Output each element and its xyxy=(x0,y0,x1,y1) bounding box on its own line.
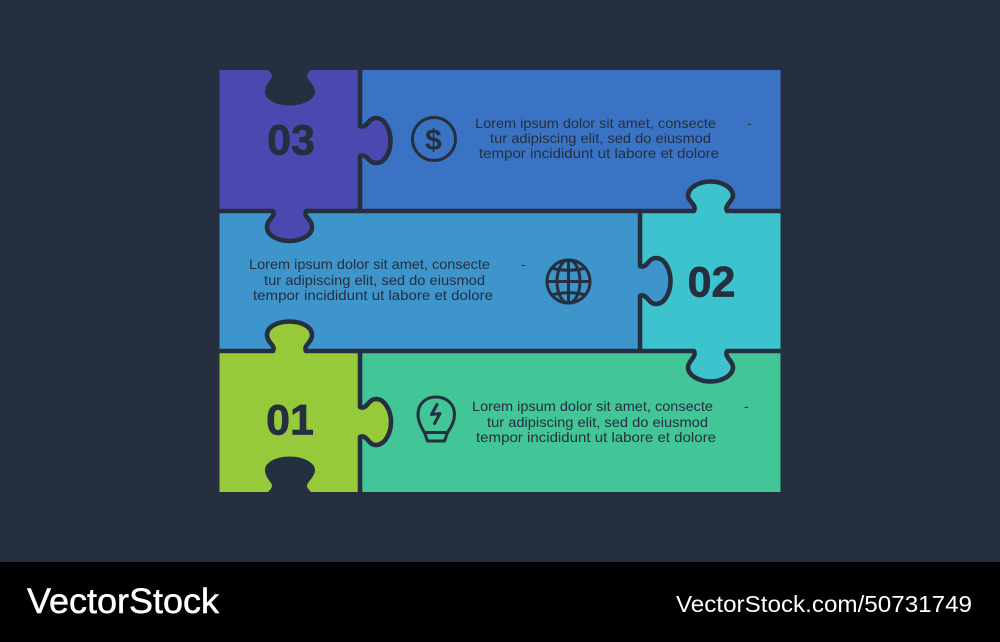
text block: row 2: tempor incididunt ut labore et dolore xyxy=(253,288,493,303)
footer logo: VectorStock xyxy=(27,582,220,621)
icon: light bulb xyxy=(418,397,454,441)
text block: row 2: Lorem ipsum dolor sit amet, consecte xyxy=(249,257,490,272)
number 01: 01 xyxy=(266,396,314,444)
text block: row 1: tur adipiscing elit, sed do eiusmod xyxy=(487,415,708,430)
text block: row 3: tempor incididunt ut labore et dolore xyxy=(479,146,719,161)
footer url: VectorStock.com/50731749 xyxy=(676,591,972,617)
panel: row 3 text piece xyxy=(360,70,780,211)
panel: row 1 text piece xyxy=(360,351,780,492)
notch: top of piece 03 xyxy=(265,70,315,106)
text block: row 2: tur adipiscing elit, sed do eiusmod xyxy=(264,273,485,288)
text block: row 2: - xyxy=(521,257,526,272)
text block: row 1: - xyxy=(744,399,749,414)
text block: row 3 xyxy=(475,116,752,161)
tab of row 2 piece into 02 xyxy=(640,258,670,304)
panel: row 2 text piece xyxy=(220,211,640,351)
text block: row 1 xyxy=(472,399,749,445)
text block: row 2 xyxy=(249,257,526,303)
number 03: 03 xyxy=(267,116,315,164)
text block: row 3: Lorem ipsum dolor sit amet, consecte xyxy=(475,116,716,131)
text block: row 3: - xyxy=(747,116,752,131)
puzzle piece 02 xyxy=(640,182,780,382)
outlines: piece borders xyxy=(220,70,780,492)
icon: globe xyxy=(547,260,590,303)
puzzle infographic xyxy=(220,70,780,492)
puzzle piece 03 xyxy=(220,70,390,241)
icon: dollar coin xyxy=(412,118,456,160)
number 02: 02 xyxy=(688,258,735,306)
icon: dollar coin: $ xyxy=(425,124,442,157)
text block: row 1: Lorem ipsum dolor sit amet, consecte xyxy=(472,399,713,414)
puzzle piece 01 xyxy=(220,322,391,492)
text block: row 1: tempor incididunt ut labore et dolore xyxy=(476,430,716,445)
footer bar xyxy=(0,562,1000,642)
notch: bottom of piece 01 xyxy=(265,456,315,492)
text block: row 3: tur adipiscing elit, sed do eiusmod xyxy=(490,131,711,146)
